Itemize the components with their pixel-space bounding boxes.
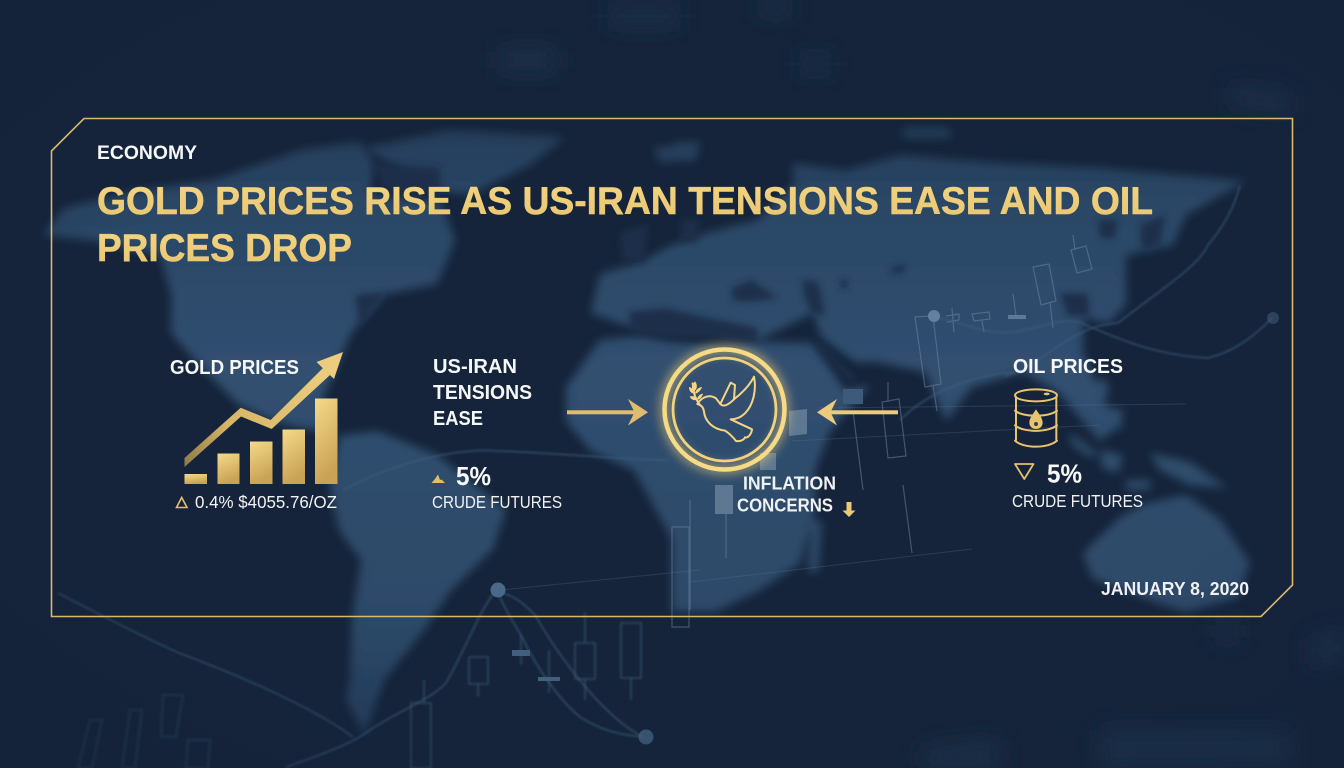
greenland — [365, 130, 565, 195]
tensions heading: EASE — [433, 408, 483, 430]
icon: dove — [689, 377, 755, 441]
inflation concerns note — [737, 474, 856, 517]
category label: ECONOMY — [97, 142, 197, 164]
inflation text — [737, 474, 836, 516]
background grid lines — [500, 404, 1186, 590]
title: GOLD PRICES RISE AS US-IRAN TENSIONS EASE AND OIL — [97, 180, 1153, 223]
faint edge blobs — [497, 0, 1344, 768]
tensions percent: 5% — [456, 463, 491, 491]
south america — [330, 431, 506, 735]
gold change: 0.4% $4055.76/OZ — [195, 492, 337, 512]
uk and northern europe — [654, 128, 950, 190]
australia — [1083, 495, 1250, 612]
arrow: right to centre — [817, 399, 898, 426]
down marker — [1015, 464, 1034, 479]
background candles below frame — [411, 612, 641, 768]
gold prices heading: GOLD PRICES — [170, 357, 299, 379]
oil caption: CRUDE FUTURES — [1012, 491, 1143, 511]
icon: oil barrel — [1015, 389, 1057, 447]
title — [97, 180, 1153, 270]
bar chart — [184, 398, 338, 484]
inflation text: CONCERNS — [737, 496, 833, 516]
small up marker — [432, 474, 445, 483]
oil prices block — [1012, 356, 1143, 511]
tensions heading: TENSIONS — [433, 382, 532, 404]
background candlestick chart — [672, 235, 1092, 627]
madagascar — [808, 519, 822, 573]
north america — [43, 142, 455, 432]
chart nodes — [490, 310, 1279, 744]
date: JANUARY 8, 2020 — [1101, 579, 1249, 599]
tensions heading: US-IRAN — [433, 356, 517, 378]
tensions caption: CRUDE FUTURES — [432, 492, 562, 512]
title: PRICES DROP — [97, 227, 352, 270]
background trend lines — [58, 185, 1272, 767]
icon: down arrow — [842, 502, 856, 517]
gold prices block — [170, 352, 343, 512]
panel frame — [52, 118, 1292, 616]
tensions heading — [433, 356, 532, 430]
tensions block — [432, 356, 562, 512]
inland seas — [355, 163, 1165, 380]
candle dashes — [512, 650, 560, 681]
islands — [1070, 380, 1227, 490]
rising arrow — [184, 352, 343, 467]
arrow: left to centre — [567, 399, 648, 426]
europe and asia — [591, 155, 1246, 441]
icon: peace dove coin — [664, 350, 784, 470]
dim far candles — [78, 695, 210, 768]
inflation text: INFLATION — [743, 474, 836, 494]
oil percent: 5% — [1047, 460, 1082, 488]
africa — [566, 336, 870, 612]
continents — [43, 128, 1250, 735]
oil heading: OIL PRICES — [1013, 356, 1123, 378]
